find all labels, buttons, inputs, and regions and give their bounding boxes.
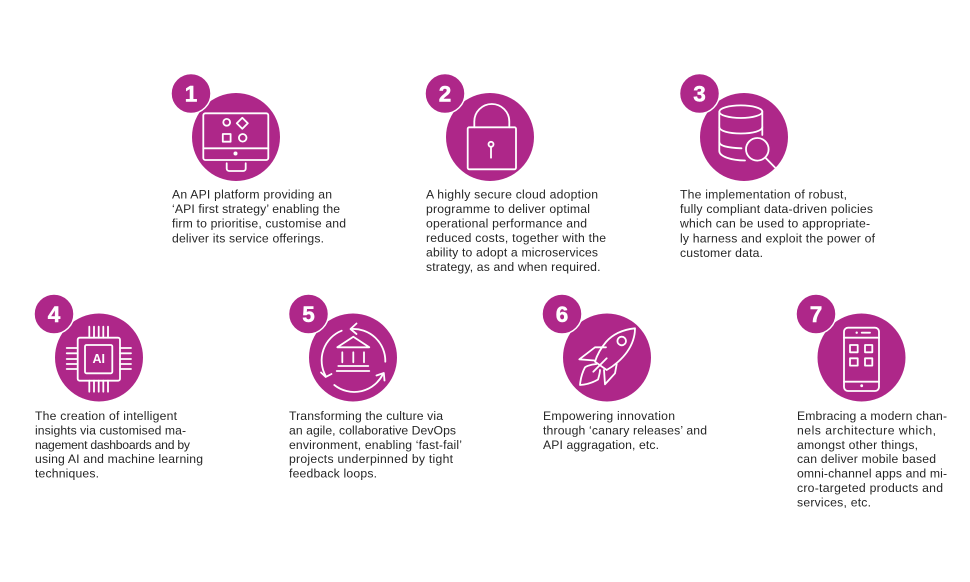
text: item 1 description: ‘API first strategy’ enabling the [172,202,340,216]
icon: bank with cycle arrows [309,314,397,402]
text: item 7 description: Embracing a modern chan- [797,409,947,423]
text: item 4 description: using AI and machine learning [35,452,203,466]
text: item 4 description: nagement dashboards and by [35,438,191,452]
text: item 6 description [543,409,707,452]
text: item 7 description: services, etc. [797,495,871,509]
text: item 2 description: strategy, as and when required. [426,260,600,274]
text: item 1 description [172,188,346,245]
text: item 7 description: cro-targeted products and [797,481,943,495]
icon: padlock [446,93,534,181]
badge: number 3: 3 [693,82,706,106]
badge: number 2 [425,74,465,114]
text: item 7 description: nels architecture which, [797,423,936,437]
icon: AI chip: AI [92,352,105,366]
icon: AI chip [55,314,143,402]
panel: item 2 secure cloud [425,74,606,274]
text: item 1 description: An API platform providing an [172,188,332,202]
text: item 4 description: insights via customised ma- [35,423,186,437]
text: item 6 description: API aggragation, etc. [543,438,659,452]
badge: number 6 [542,294,582,334]
text: item 7 description [797,409,947,509]
icon: database with magnifier [700,93,788,181]
badge: number 3 [680,74,720,114]
text: item 4 description: techniques. [35,467,99,481]
panel: item 3 data policies [679,74,876,260]
text: item 3 description: fully compliant data-driven policies [680,202,873,216]
text: item 3 description [679,188,876,260]
text: item 7 description: amongst other things, [797,438,918,452]
panel: item 4 AI insights [34,294,203,481]
badge: number 5 [288,294,328,334]
text: item 5 description: feedback loops. [289,467,377,481]
text: item 7 description: omni-channel apps and mi- [797,467,947,481]
badge: number 2: 2 [439,82,451,106]
badge: number 5: 5 [302,302,315,327]
text: item 1 description: deliver its service offerings. [172,231,324,245]
icon: smartphone [818,314,906,402]
badge: number 4: 4 [48,302,61,327]
panel: item 5 culture [288,294,462,481]
badge: number 4 [34,294,74,334]
badge: number 7 [796,294,836,334]
text: item 5 description: environment, enabling ‘fast-fail’ [289,438,462,452]
text: item 2 description: operational performance and [426,216,587,230]
text: item 5 description: an agile, collaborative DevOps [289,423,456,437]
panel: item 7 modern channels [796,294,947,509]
icon: monitor [192,93,280,181]
text: item 3 description: The implementation of robust, [680,188,847,202]
badge: number 7: 7 [810,302,822,327]
text: item 2 description: A highly secure cloud adoption [426,188,598,202]
panel: item 6 innovation [542,294,707,452]
text: item 3 description: customer data. [680,246,763,260]
text: item 7 description: can deliver mobile based [797,452,936,466]
panel: item 1 API platform [171,74,346,245]
text: item 6 description: Empowering innovation [543,409,675,423]
text: item 2 description: ability to adopt a microservices [426,246,598,260]
text: item 3 description: ly harness and exploit the power of [680,231,876,245]
text: item 2 description: reduced costs, together with the [426,231,606,245]
badge: number 6: 6 [556,302,568,327]
text: item 5 description [289,409,462,481]
text: item 6 description: through ‘canary releases’ and [543,423,707,437]
text: item 4 description: The creation of intelligent [35,409,178,423]
text: item 2 description: programme to deliver optimal [426,202,590,216]
badge: number 1: 1 [185,82,197,106]
icon: rocket [563,314,651,402]
badge: number 1 [171,74,211,114]
text: item 5 description: Transforming the culture via [289,409,443,423]
text: item 1 description: firm to prioritise, customise and [172,217,346,231]
text: item 2 description [426,188,606,274]
text: item 4 description [35,409,203,481]
text: item 3 description: which can be used to appropriate- [679,217,870,231]
text: item 5 description: projects underpinned by tight [289,452,454,466]
